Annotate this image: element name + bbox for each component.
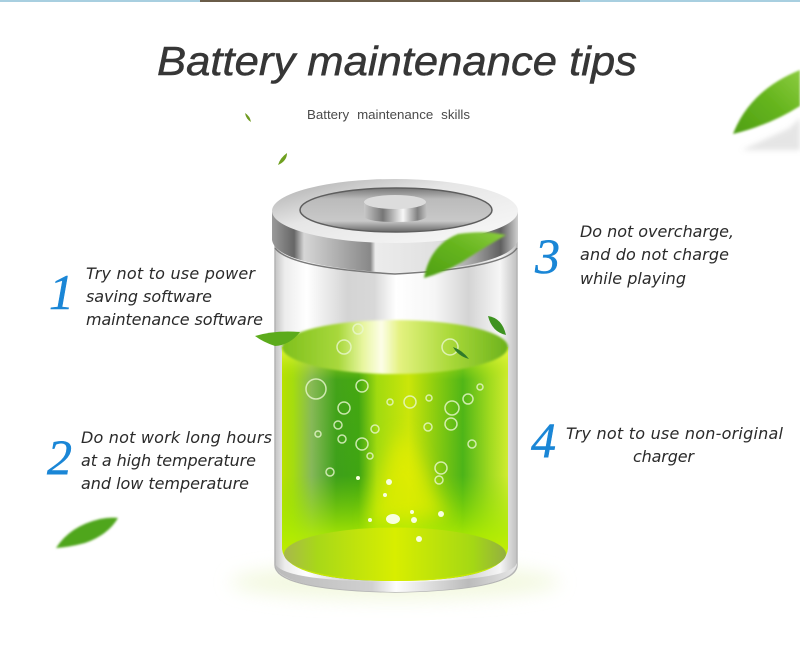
tip 3 text: and do not charge — [580, 245, 729, 264]
tip 1 text: saving software — [86, 287, 212, 306]
subtitle: Battery maintenance skills — [307, 108, 470, 122]
liquid body — [282, 347, 508, 581]
tip 2 text: Do not work long hours — [81, 428, 272, 447]
icon: leaf at liquid right — [488, 316, 506, 335]
number 2: 2 — [47, 429, 72, 485]
tip 1 — [49, 264, 263, 329]
ground glow — [230, 564, 560, 600]
tip 4 — [531, 412, 784, 468]
icon: leaf at liquid left — [255, 332, 300, 346]
tip 1 text: maintenance software — [86, 310, 263, 329]
glass body — [275, 240, 517, 592]
icon: small leaf top — [245, 113, 251, 122]
tip 3 text: Do not overcharge, — [580, 222, 734, 241]
icon: small leaf left of battery — [278, 153, 287, 165]
tip 2 text: and low temperature — [81, 474, 249, 493]
number 1: 1 — [49, 264, 74, 320]
icon: small dark leaf on surface — [453, 347, 469, 359]
tip 4 text: Try not to use non-original — [566, 424, 784, 443]
icon: leaf over battery cap — [424, 232, 506, 278]
tip 1 text: Try not to use power — [86, 264, 256, 283]
cap rim — [272, 212, 518, 273]
battery — [230, 179, 560, 600]
liquid surface — [282, 320, 508, 374]
cap recess — [300, 188, 492, 232]
tip 4 text: charger — [633, 447, 695, 466]
tip 2 text: at a high temperature — [81, 451, 256, 470]
icon: large blurred leaf top right — [733, 70, 800, 150]
glass base — [275, 563, 517, 592]
icon: large blurred leaf bottom left — [56, 518, 118, 548]
number 4: 4 — [531, 412, 556, 468]
liquid floor — [284, 528, 506, 580]
tip 2 — [47, 428, 272, 493]
title: Battery maintenance tips — [157, 38, 637, 84]
bright bubbles — [356, 476, 444, 542]
cap bottom edge — [275, 248, 517, 274]
bubbles — [306, 324, 483, 484]
top image strip — [0, 0, 800, 2]
cap top — [272, 179, 518, 243]
tip 3 — [534, 222, 734, 288]
cap button — [364, 195, 427, 222]
number 3: 3 — [534, 228, 560, 284]
tip 3 text: while playing — [580, 269, 686, 288]
